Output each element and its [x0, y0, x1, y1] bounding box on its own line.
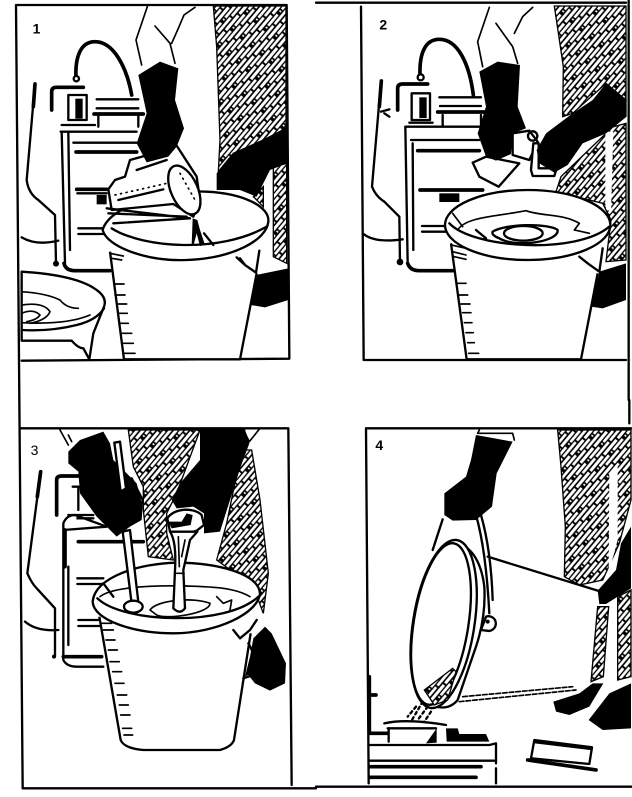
sprayer lance	[363, 82, 403, 263]
lower leg in black	[591, 263, 626, 308]
lower trouser hatching	[591, 590, 631, 682]
flask and pouring stream	[167, 510, 204, 612]
trouser hatching	[213, 6, 287, 263]
upper trouser hatching	[558, 430, 631, 585]
panel 2 frame	[316, 0, 629, 400]
black glove on handle	[444, 435, 513, 521]
panel 1: measuring concentrate into a jug over the bucket	[16, 5, 289, 400]
white gap between legs	[609, 467, 618, 573]
second gloved arm	[217, 127, 287, 197]
black glove holding jug	[137, 62, 184, 162]
sleeve	[60, 428, 260, 445]
stirring stick	[114, 442, 143, 613]
sprayer tank opening	[369, 677, 496, 783]
bucket tipped over, with handle	[400, 515, 599, 713]
number 4: 4	[375, 437, 383, 453]
sprayer	[22, 42, 143, 271]
sprayer lance	[25, 472, 58, 657]
falling liquid	[408, 702, 431, 722]
trouser hatching	[554, 6, 626, 262]
measuring jug pouring	[107, 146, 213, 246]
water pan at lower left	[22, 272, 105, 359]
sleeve	[136, 7, 195, 65]
panel 3: pouring and stirring in the bucket	[19, 400, 316, 788]
trouser hatching	[128, 430, 268, 613]
sprayer	[363, 39, 484, 271]
number 1: 1	[33, 20, 41, 36]
panel 2: opening the concentrate bottle	[316, 0, 629, 400]
sprayer hose	[420, 39, 473, 95]
panel 4 frame	[316, 400, 632, 787]
left black glove	[68, 432, 143, 537]
panel 1 frame	[16, 5, 289, 400]
number 2: 2	[379, 16, 387, 32]
sprayer	[25, 472, 143, 667]
panel 4: pouring the mixture into the sprayer tank	[316, 400, 632, 787]
sprayer hose	[76, 42, 132, 95]
white strip between legs	[605, 132, 613, 213]
bucket with graduated scale	[103, 192, 268, 359]
black leg and shoes	[553, 527, 631, 730]
bucket with water and scale	[93, 563, 260, 750]
sleeve	[478, 7, 533, 67]
number 3: 3	[31, 442, 39, 458]
left black glove	[478, 62, 526, 161]
sprayer lance	[22, 83, 58, 263]
right black glove	[172, 429, 249, 533]
fallen lid	[528, 740, 596, 770]
sleeve cuff	[478, 430, 514, 440]
bucket with water and scale	[445, 190, 610, 359]
black boot	[245, 627, 286, 691]
lower leg in black	[251, 268, 288, 307]
right black glove	[537, 83, 627, 173]
small packet and bottle	[473, 131, 557, 187]
panel 3 frame	[19, 400, 316, 788]
